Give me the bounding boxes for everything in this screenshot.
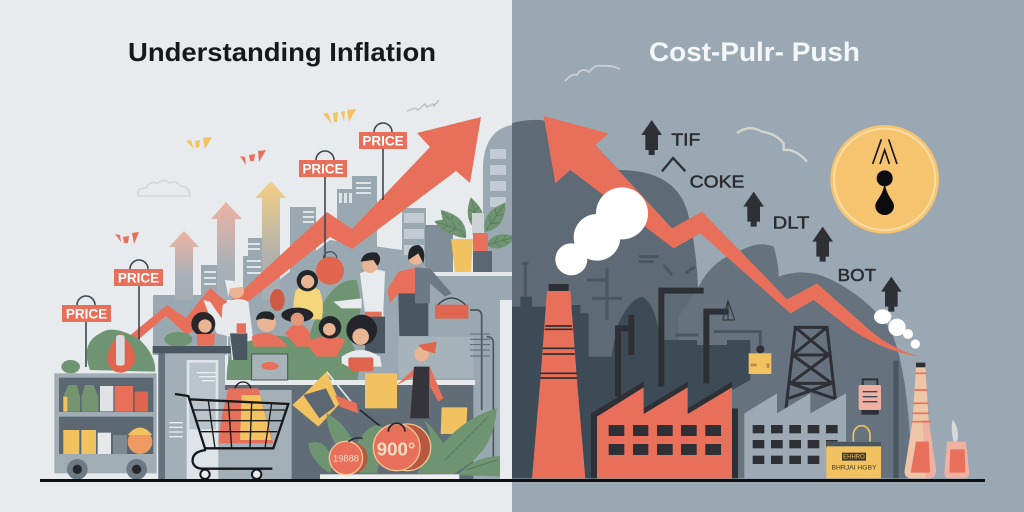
yellow tag bag: EHHRO (843, 455, 865, 461)
label DLT: DLT (773, 212, 809, 232)
lamp (723, 301, 735, 320)
red seed pod ornament (107, 333, 135, 373)
gradient up arrow 3 (255, 181, 286, 300)
red rising arrow (128, 117, 481, 345)
price tag 2: PRICE (118, 270, 159, 286)
gradient up arrow 1 (169, 231, 199, 300)
up arrow COKE (743, 192, 764, 227)
shopping scene in detail coordinates (54, 245, 500, 480)
pink jar with flame (944, 419, 969, 478)
price tag 4 (359, 123, 407, 200)
price tag 2 (114, 260, 163, 345)
counter top (225, 380, 475, 385)
kiosk (153, 346, 232, 479)
price tag 1: PRICE (66, 306, 107, 322)
pink suitcase (859, 379, 881, 415)
yellow component box (749, 345, 771, 374)
yellow box (365, 373, 397, 408)
title: cost push: Cost-Pulr- Push (649, 37, 860, 67)
shopper: man in white shirt (333, 252, 385, 353)
title: understanding inflation: Understanding Inflation (128, 37, 436, 67)
price tag 3: PRICE (302, 162, 344, 176)
small white smoke (874, 309, 920, 349)
background mound large (512, 120, 699, 478)
shopper: boy (252, 311, 288, 347)
up arrow DLT (812, 227, 833, 262)
up arrow BOT (881, 277, 902, 312)
building windows (204, 149, 506, 285)
price tag 3 (299, 151, 347, 260)
decorative cloud outline (737, 128, 807, 162)
smokestack pipes (618, 291, 729, 397)
left panel: inflation scene (54, 100, 518, 480)
shelf cart (54, 373, 157, 480)
price bubble small (329, 438, 368, 475)
shopping bag held (441, 407, 467, 434)
foliage behind stalls (61, 280, 463, 380)
thin post (893, 361, 899, 478)
right panel background (512, 0, 1024, 512)
yellow tag bag (826, 426, 881, 478)
left panel background (0, 0, 512, 512)
peach bottle chimney (905, 363, 936, 478)
right panel: cost-push scene (512, 116, 969, 478)
price bubble small: 19888 (333, 453, 359, 463)
shopping cart (175, 382, 288, 479)
shopper: small girl (191, 312, 215, 346)
shelf goods (63, 385, 152, 454)
gradient up arrow 2 (211, 202, 242, 300)
upper right block (398, 337, 473, 378)
label COKE: COKE (690, 171, 744, 191)
chevron (662, 158, 685, 171)
ground line (40, 479, 985, 482)
red handbag (316, 252, 344, 285)
price tag 1 (62, 296, 111, 367)
red factory (591, 382, 738, 478)
shopper: woman in blazer (387, 245, 452, 336)
price bubble large: 900° (377, 439, 415, 460)
basket on counter (252, 354, 288, 380)
yellow tag bag: BHRJAI HGBY (831, 464, 877, 471)
dark city silhouette (512, 297, 750, 478)
decorative cloud (138, 180, 190, 196)
counter body (225, 385, 473, 479)
shopper with cap (397, 342, 443, 418)
squiggle (407, 100, 439, 111)
confetti marks (115, 109, 356, 244)
up arrow TIF (641, 120, 662, 155)
red falling arrow (544, 116, 919, 357)
shopper: older woman (203, 280, 253, 360)
red wire basket (435, 298, 493, 457)
white smoke cloud (555, 187, 648, 275)
label TIF: TIF (671, 129, 700, 149)
flag and pole (292, 372, 385, 430)
bottom foliage (308, 408, 500, 477)
seated group with dark hair (281, 308, 382, 371)
center pod highlight (116, 335, 125, 366)
counter light panel (225, 390, 292, 479)
mask-like red face (270, 289, 285, 311)
yellow coin sun (830, 125, 939, 234)
oil derrick tower (786, 327, 835, 408)
price bubble large (373, 423, 431, 471)
background mound third (679, 244, 912, 478)
gray factory (744, 393, 846, 478)
building skyline (153, 125, 512, 480)
label BOT: BOT (838, 265, 876, 285)
price tag 4: PRICE (362, 134, 404, 148)
front foliage in crowd (288, 345, 358, 380)
shopper: woman in yellow (294, 270, 323, 319)
top-right sky squiggle (565, 66, 620, 81)
white base (320, 474, 459, 479)
potted plant (425, 195, 518, 276)
faint factory glyphs (522, 257, 760, 347)
large red chimney (532, 284, 585, 478)
